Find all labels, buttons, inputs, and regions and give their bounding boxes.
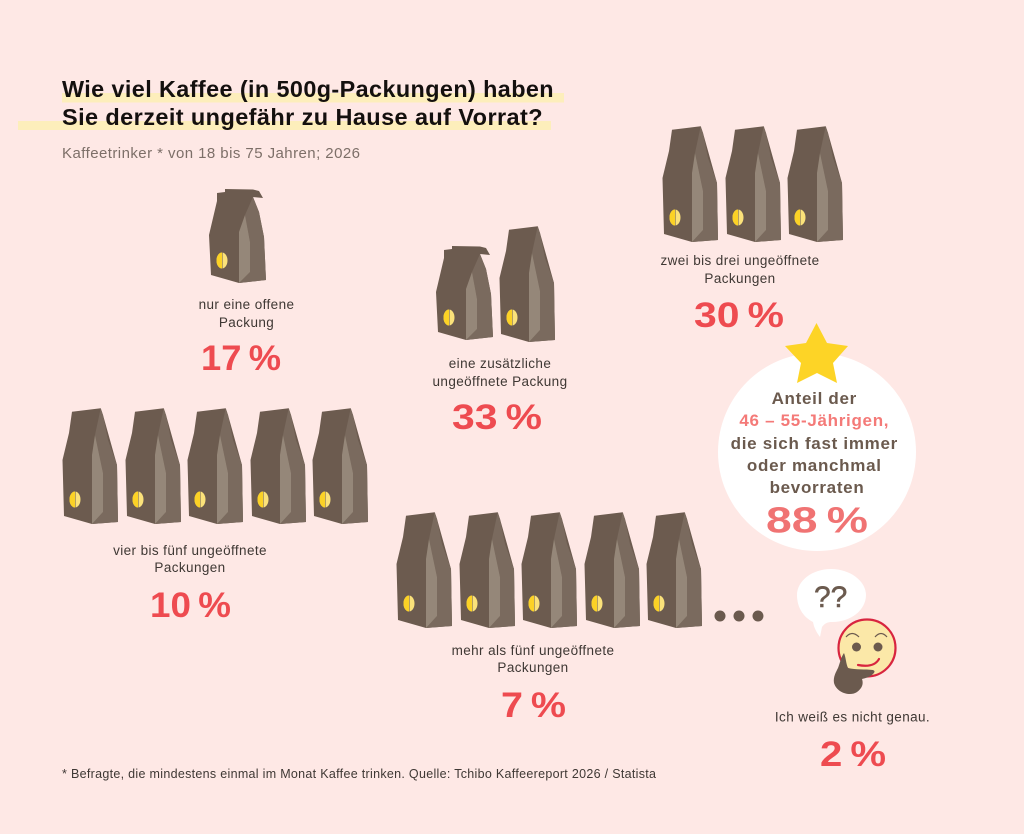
- value: 30 %: 30 %: [694, 296, 784, 335]
- value: 7 %: 7 %: [501, 686, 566, 725]
- value: 88 %: 88 %: [766, 500, 868, 540]
- icon: five closed coffee bags with dots: [396, 512, 764, 628]
- title: Sie derzeit ungefähr zu Hause auf Vorrat?: [62, 104, 543, 130]
- label: nur eine offene Packung: nur eine offene: [199, 297, 294, 312]
- label: mehr als fünf ungeöffnete Packungen: Packungen: [497, 660, 569, 675]
- group: Ich weiß es nicht genau 2 %: [775, 569, 930, 774]
- icon: open and closed coffee bags: [436, 226, 555, 342]
- label: eine zusätzliche ungeöffnete Packung: ungeöffnete Packung: [433, 374, 567, 389]
- group: eine zusätzliche ungeöffnete Packung 33 %: [433, 226, 567, 437]
- callout text: die sich fast immer: [731, 434, 898, 453]
- icon: speech bubble with question marks: ??: [814, 581, 847, 614]
- callout text: bevorraten: [770, 478, 864, 497]
- value: 2 %: 2 %: [820, 735, 886, 774]
- icon: five closed coffee bags: [62, 408, 368, 524]
- value: 17 %: 17 %: [201, 339, 281, 378]
- icon: star: [785, 323, 848, 383]
- white circle: [718, 353, 916, 551]
- callout text: oder manchmal: [747, 456, 882, 475]
- icon: open coffee bag: [209, 189, 266, 283]
- value: 33 %: 33 %: [452, 398, 542, 437]
- callout text: Anteil der: [772, 389, 857, 408]
- label: vier bis fünf ungeöffnete Packungen: vier bis fünf ungeöffnete: [113, 543, 267, 558]
- label: vier bis fünf ungeöffnete Packungen: Packungen: [154, 560, 226, 575]
- group: zwei bis drei ungeöffnete Packungen 30 %: [660, 126, 843, 335]
- label: nur eine offene Packung: Packung: [219, 315, 274, 330]
- title: [18, 76, 564, 130]
- label: eine zusätzliche ungeöffnete Packung: eine zusätzliche: [449, 356, 551, 371]
- group: nur eine offene Packung 17 %: [199, 189, 294, 378]
- callout: 46–55-Jährige 88 %: [718, 323, 916, 551]
- icon: speech bubble with question marks: [797, 569, 866, 637]
- label: mehr als fünf ungeöffnete Packungen: mehr als fünf ungeöffnete: [452, 643, 614, 658]
- subtitle: Kaffeetrinker * von 18 bis 75 Jahren; 2026: [62, 145, 360, 162]
- group: vier bis fünf ungeöffnete Packungen 10 %: [62, 408, 368, 625]
- value: 10 %: 10 %: [150, 586, 231, 625]
- footnote: * Befragte, die mindestens einmal im Monat Kaffee trinken. Quelle: Tchibo Kaffeereport 2026 / Statista: [62, 767, 656, 781]
- label: zwei bis drei ungeöffnete Packungen: Packungen: [704, 271, 776, 286]
- label: zwei bis drei ungeöffnete Packungen: zwei bis drei ungeöffnete: [660, 253, 820, 268]
- title: Wie viel Kaffee (in 500g-Packungen) haben: [62, 76, 554, 102]
- callout text: 46 – 55-Jährigen,: [739, 411, 889, 430]
- icon: thinking face: [834, 620, 896, 694]
- icon: three closed coffee bags: [662, 126, 843, 242]
- label: Ich weiß es nicht genau.: Ich weiß es nicht genau.: [775, 710, 930, 724]
- group: mehr als fünf ungeöffnete Packungen 7 %: [396, 512, 764, 725]
